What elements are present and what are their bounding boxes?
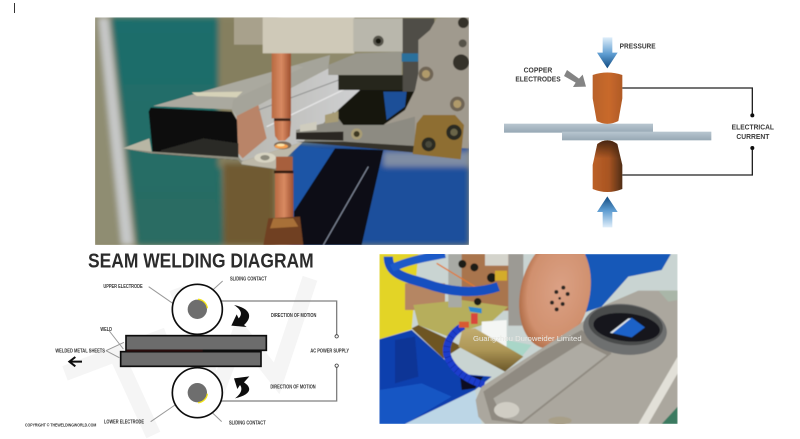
copper bus blocks bbox=[460, 254, 510, 311]
diagram labels: WELDED METAL SHEETS bbox=[55, 348, 105, 354]
blue water hoses bbox=[388, 257, 498, 291]
lower roller electrode bbox=[172, 368, 222, 418]
dark band behind arm bbox=[338, 89, 418, 126]
blue cabinet upper right bbox=[582, 254, 671, 313]
diagram labels: LOWER ELECTRODE bbox=[104, 419, 144, 425]
diagram labels: AC POWER SUPPLY bbox=[310, 348, 349, 354]
diagram labels: UPPER ELECTRODE bbox=[103, 284, 143, 290]
sheets bbox=[504, 124, 653, 133]
labels: PRESSURE bbox=[620, 44, 656, 51]
diagram labels: WELD bbox=[100, 327, 112, 333]
power wires bbox=[202, 301, 337, 401]
brown clamp block bbox=[413, 115, 464, 159]
flexible coolant nozzle bbox=[447, 326, 484, 385]
blue panel under arm bbox=[294, 145, 335, 210]
lower copper electrode bbox=[593, 140, 622, 192]
current wires bbox=[622, 88, 752, 175]
watermark letters bbox=[65, 278, 310, 435]
weld glow bbox=[274, 141, 291, 149]
upper roller electrode bbox=[172, 284, 222, 334]
right bracket bbox=[383, 17, 469, 148]
photo: seam welding machine with copper wheel bbox=[379, 254, 678, 424]
labels bbox=[515, 44, 775, 141]
photo: spot welding electrodes on steel profile bbox=[95, 17, 469, 245]
diagram labels: COPYRIGHT © THEWELDINGWORLD.COM bbox=[25, 423, 97, 428]
blue base bbox=[379, 330, 492, 424]
diagram: seam welding bbox=[25, 250, 349, 435]
motion arrows bbox=[231, 305, 249, 327]
upper copper electrode bbox=[593, 72, 622, 124]
labels: CURRENT bbox=[736, 134, 770, 141]
diagram labels: DIRECTION OF MOTION bbox=[270, 384, 316, 390]
pressure arrows bbox=[597, 37, 618, 68]
diagram labels: SLIDING CONTACT bbox=[229, 421, 266, 427]
diagram labels: SLIDING CONTACT bbox=[230, 277, 267, 283]
dark conveyor rail bbox=[294, 148, 383, 245]
upper housing bbox=[234, 17, 264, 45]
labels: ELECTRODES bbox=[515, 77, 561, 84]
weld line bbox=[127, 350, 203, 352]
orange air line bbox=[437, 263, 475, 287]
watermark text: Guangzhou Duroweider Limited bbox=[473, 334, 582, 343]
left arrow bbox=[69, 357, 82, 366]
copper wheel bbox=[518, 254, 592, 348]
steel hat profile bbox=[232, 68, 360, 162]
labels: ELECTRICAL bbox=[732, 125, 775, 132]
text cursor mark bbox=[14, 3, 15, 13]
diagram labels: DIRECTION OF MOTION bbox=[271, 313, 316, 319]
title: SEAM WELDING DIAGRAM bbox=[88, 250, 314, 272]
metal sheets bbox=[126, 336, 266, 350]
lower electrode bbox=[276, 157, 293, 171]
left and right flanges bbox=[123, 138, 152, 153]
muffler body bbox=[476, 291, 678, 424]
diagram: resistance spot welding bbox=[504, 37, 775, 227]
profile opening bbox=[148, 107, 238, 152]
electrode pointer arrow bbox=[564, 70, 586, 87]
brass tube bbox=[458, 328, 523, 372]
yellow machine side bbox=[379, 254, 418, 339]
diagram labels bbox=[25, 277, 349, 428]
collar ring opening bbox=[582, 303, 668, 356]
white gap bbox=[482, 320, 507, 347]
upper electrode bbox=[272, 52, 291, 118]
labels: COPPER bbox=[524, 67, 552, 74]
leader lines bbox=[106, 281, 223, 422]
